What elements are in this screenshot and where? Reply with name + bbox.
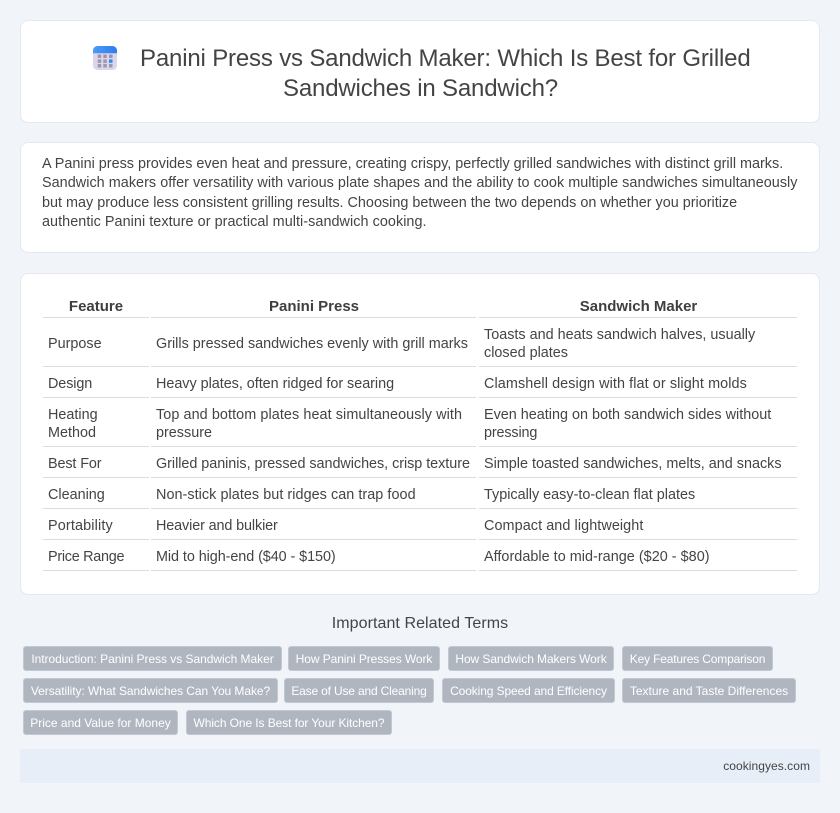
comparison table: Heating [48,407,98,423]
comparison table: pressure [156,425,212,441]
comparison table: Top and bottom plates heat simultaneously with [156,407,462,423]
comparison table: closed plates [484,345,568,361]
intro paragraph: authentic Panini texture or practical multi-sandwich cooking. [42,214,427,230]
related terms tags: Cooking Speed and Efficiency [450,684,607,698]
comparison table: Clamshell design with flat or slight molds [484,376,747,392]
comparison table: Purpose [48,336,102,352]
table card [20,273,820,595]
comparison table: Toasts and heats sandwich halves, usually [484,327,755,343]
related terms tags: Versatility: What Sandwiches Can You Make? [31,684,270,698]
related terms tags: How Sandwich Makers Work [455,652,607,666]
comparison table: pressing [484,425,537,441]
related terms tags [23,646,796,735]
comparison table: Cleaning [48,487,105,503]
comparison table: Price Range [48,549,124,565]
related terms tags: Ease of Use and Cleaning [291,684,427,698]
intro paragraph: but may produce less consistent grilling results. Choosing between the two depends on whether you prioritize [42,195,737,211]
comparison table: Simple toasted sandwiches, melts, and snacks [484,456,782,472]
comparison table: Mid to high-end ($40 - $150) [156,549,336,565]
related terms tags: Introduction: Panini Press vs Sandwich Maker [31,652,274,666]
footer source: cookingyes.com [723,759,810,773]
related terms tags: Key Features Comparison [630,652,765,666]
intro paragraph: Sandwich makers offer versatility with various plate shapes and the ability to cook multiple sandwiches simultaneously [42,175,798,191]
comparison table: Method [48,425,96,441]
comparison table [43,298,797,571]
intro card [20,142,820,253]
icon: calendar [93,46,117,70]
comparison table: Heavy plates, often ridged for searing [156,376,394,392]
comparison table: Best For [48,456,101,472]
comparison table: Grills pressed sandwiches evenly with grill marks [156,336,468,352]
related terms tags: Which One Is Best for Your Kitchen? [194,716,384,730]
related terms tags: Price and Value for Money [30,716,171,730]
comparison table: Feature [69,298,123,315]
title: Sandwiches in Sandwich? [283,75,558,102]
comparison table: Design [48,376,92,392]
comparison table: Panini Press [269,298,359,315]
comparison table: Affordable to mid-range ($20 - $80) [484,549,710,565]
comparison table: Compact and lightweight [484,518,643,534]
intro paragraph: A Panini press provides even heat and pressure, creating crispy, perfectly grilled sandwiches with distinct grill marks. [42,156,783,172]
comparison table: Typically easy-to-clean flat plates [484,487,695,503]
footer [20,749,820,783]
title [140,45,751,102]
title: Panini Press vs Sandwich Maker: Which Is Best for Grilled [140,45,751,72]
related terms tags: Texture and Taste Differences [630,684,788,698]
comparison table: Even heating on both sandwich sides without [484,407,771,423]
related terms tags: How Panini Presses Work [296,652,432,666]
comparison table: Portability [48,518,113,534]
comparison table: Heavier and bulkier [156,518,278,534]
intro paragraph [42,156,798,230]
comparison table: Sandwich Maker [580,298,697,315]
comparison table: Non-stick plates but ridges can trap food [156,487,416,503]
related terms heading: Important Related Terms [332,615,508,632]
title card [20,20,820,123]
comparison table: Grilled paninis, pressed sandwiches, crisp texture [156,456,470,472]
